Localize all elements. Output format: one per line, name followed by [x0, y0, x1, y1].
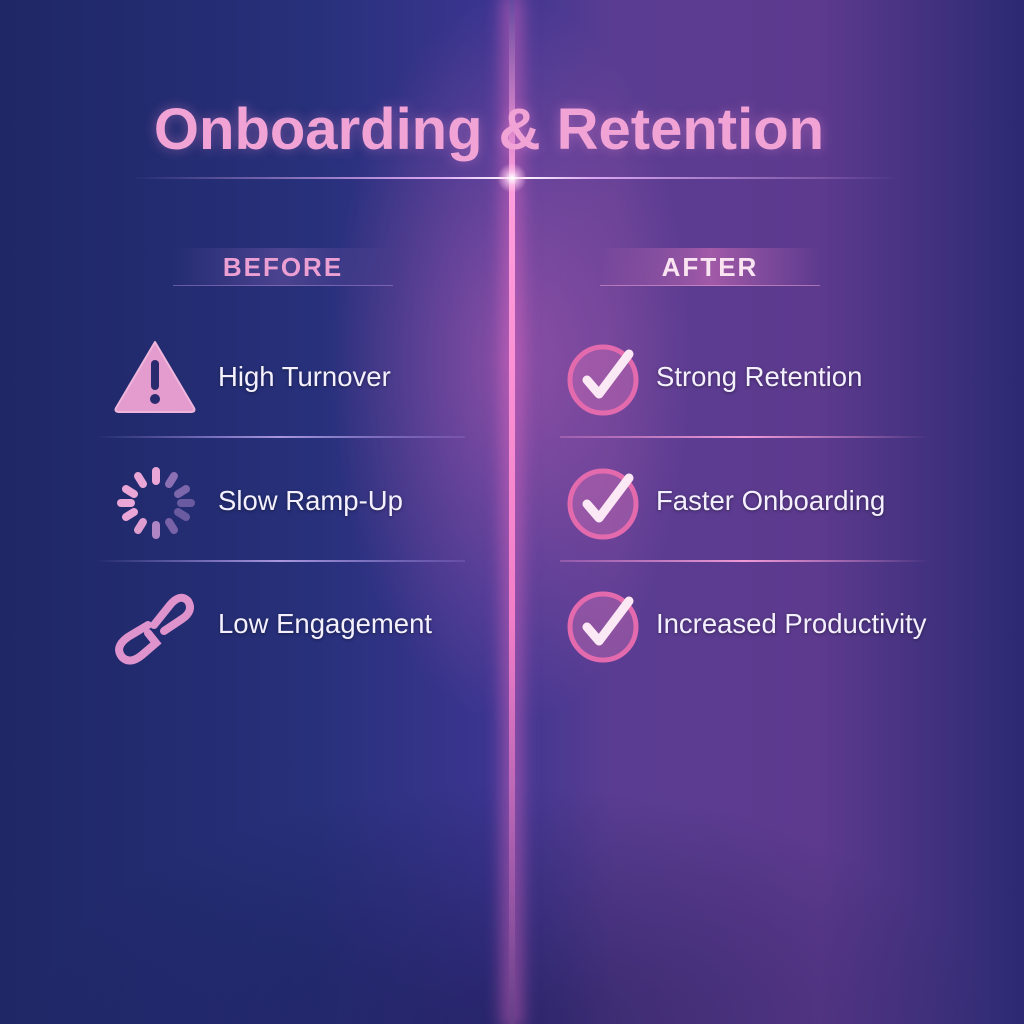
title: Onboarding & Retention: [154, 97, 824, 162]
icon: check circle 2: [568, 468, 638, 540]
AFTER heading: AFTER: [662, 252, 758, 282]
text: Increased Productivity: Increased Productivity: [656, 608, 927, 639]
icon: loading spinner: [117, 467, 195, 539]
glow star: [497, 163, 527, 193]
icon: broken chain: [115, 594, 194, 664]
AFTER heading: [600, 248, 820, 286]
BEFORE heading: BEFORE: [223, 252, 343, 282]
text: Strong Retention: Strong Retention: [656, 361, 862, 392]
text: High Turnover: High Turnover: [218, 361, 391, 392]
center glowing divider line: [509, 0, 515, 1024]
text: Low Engagement: Low Engagement: [218, 608, 432, 639]
text: Slow Ramp-Up: Slow Ramp-Up: [218, 485, 403, 516]
icon: warning triangle: [114, 341, 196, 413]
text: Faster Onboarding: Faster Onboarding: [656, 485, 885, 516]
title underline: [130, 177, 900, 179]
icon: check circle 3: [568, 592, 638, 662]
BEFORE heading: [173, 248, 393, 286]
dividers: [95, 436, 465, 438]
icon: check circle 1: [568, 344, 638, 416]
